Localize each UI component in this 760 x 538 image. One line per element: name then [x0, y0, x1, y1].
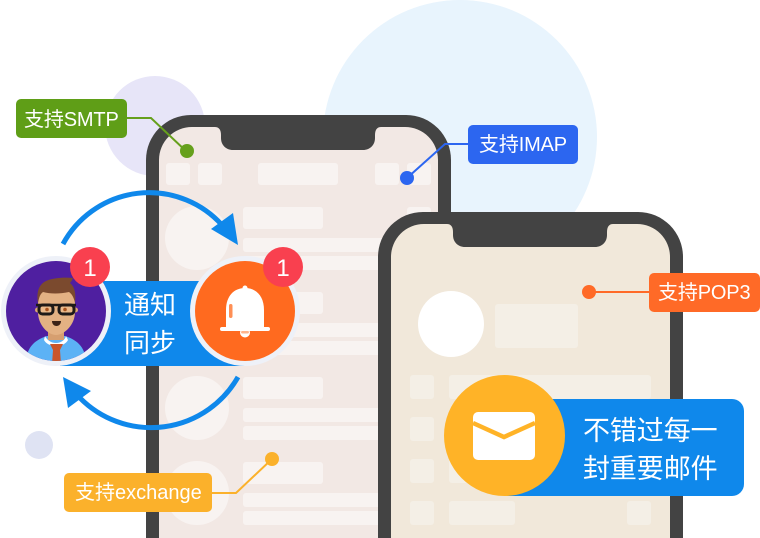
mail banner — [504, 399, 744, 496]
sync banner — [60, 281, 245, 366]
mail banner: 不错过每一 — [583, 416, 718, 446]
callout: exchange — [64, 452, 279, 512]
arrow: avatar to bell — [63, 193, 238, 245]
mail banner: 封重要邮件 — [583, 454, 718, 484]
callout: SMTP: 支持SMTP — [24, 108, 119, 131]
callout: SMTP — [16, 99, 194, 158]
callout: IMAP: 支持IMAP — [479, 133, 567, 156]
phone: back device — [146, 115, 451, 538]
icon: bell — [190, 256, 300, 366]
badge: avatar count: 1 — [83, 255, 97, 282]
callout: exchange: 支持exchange — [75, 481, 202, 504]
icon: user avatar — [1, 256, 111, 366]
callout: IMAP — [400, 125, 578, 185]
icon: envelope — [444, 375, 565, 496]
badge: bell count: 1 — [276, 255, 290, 282]
background circles — [25, 0, 597, 459]
callout: POP3: 支持POP3 — [658, 281, 750, 304]
arrow: bell to avatar — [63, 377, 238, 428]
badge: avatar count — [70, 247, 110, 287]
phone: front device — [378, 212, 683, 538]
badge: bell count — [263, 247, 303, 287]
callout: POP3 — [582, 273, 760, 312]
sync banner: 同步 — [124, 328, 176, 358]
sync banner: 通知 — [124, 290, 176, 320]
